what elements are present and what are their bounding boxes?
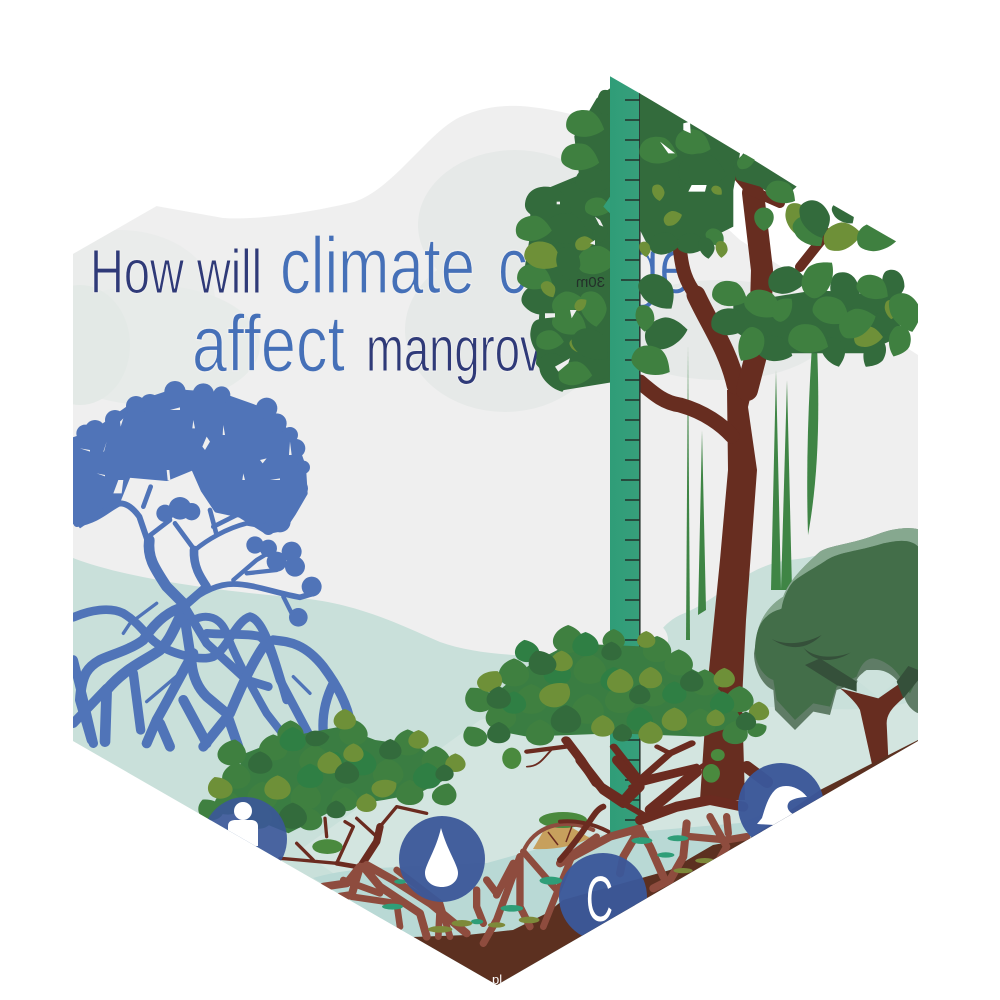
icon: water drop badge bbox=[399, 816, 485, 902]
title bbox=[94, 236, 684, 385]
blue canopy bbox=[73, 381, 322, 627]
fish bbox=[382, 835, 688, 924]
green hills bbox=[73, 530, 918, 990]
central tree leaves bbox=[457, 625, 771, 783]
icon: carbon badge bbox=[559, 853, 647, 941]
tall tree trunk bbox=[640, 170, 827, 800]
upper-left foliage bbox=[637, 93, 740, 261]
foliage beside ruler bbox=[632, 274, 688, 375]
lower foliage cluster bbox=[711, 262, 918, 367]
dark background tree bbox=[754, 528, 918, 767]
upper-right foliage bbox=[733, 151, 899, 255]
mangrove foliage bbox=[192, 625, 771, 933]
title: change: change bbox=[498, 221, 692, 310]
blue mangrove tree bbox=[73, 381, 351, 747]
dark tree trunk bbox=[840, 683, 905, 767]
measuring ruler bbox=[610, 70, 641, 835]
icon: person badge bbox=[208, 797, 287, 861]
blue prop roots bbox=[73, 603, 351, 747]
background haze bbox=[73, 106, 918, 655]
central tree roots bbox=[560, 760, 747, 888]
left tree roots bbox=[323, 824, 597, 943]
icon: carbon badge: C bbox=[586, 863, 613, 935]
canopy left of ruler bbox=[516, 88, 610, 392]
title: How will: How will bbox=[90, 238, 262, 307]
olive leaves on the mud bbox=[428, 858, 714, 933]
clipped footer text: pl bbox=[492, 972, 502, 987]
blue branches bbox=[77, 487, 313, 617]
hanging aerial roots bbox=[686, 345, 818, 640]
dark tree foliage bbox=[754, 528, 918, 730]
distant island with small trees bbox=[533, 812, 590, 849]
left tree branches bbox=[280, 807, 427, 867]
mirrored 30m label: 30m bbox=[576, 274, 605, 291]
dark tree shadows bbox=[772, 635, 918, 698]
left tree leaves bbox=[192, 709, 466, 854]
title: climate: climate bbox=[280, 221, 475, 310]
forest floor soil bbox=[413, 740, 918, 990]
central tree branches bbox=[527, 740, 722, 800]
canopy right of ruler bbox=[628, 93, 929, 381]
title: affect: affect bbox=[192, 299, 345, 388]
icon: wave badge bbox=[738, 763, 824, 849]
title: mangroves: mangroves? bbox=[366, 313, 616, 385]
